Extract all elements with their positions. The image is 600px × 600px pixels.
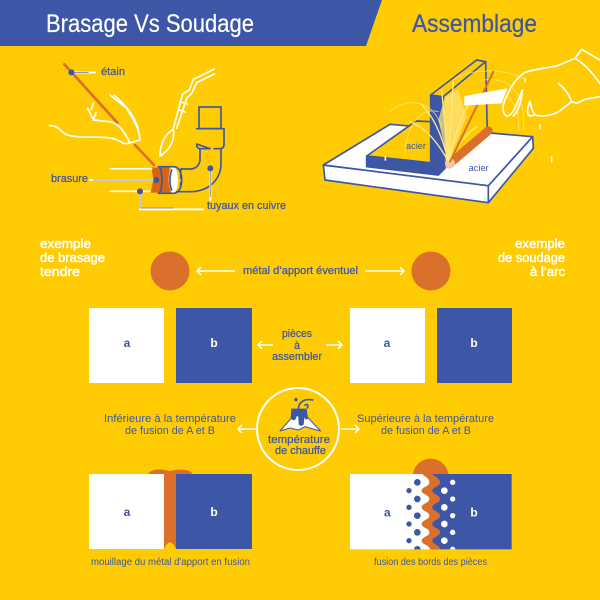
heading: exemple de soudage a l'arc: à l’arc — [530, 265, 565, 279]
heading: exemple de brasage tendre: exemple — [40, 237, 91, 251]
welded joint result — [350, 459, 512, 549]
steel upright plate — [367, 60, 487, 175]
label: acier left: acier — [406, 141, 426, 151]
icon: hand holding rod — [49, 95, 140, 144]
icon: gloved hand — [503, 49, 600, 116]
label: welding temperature: Supérieure à la température — [357, 413, 494, 425]
arrow right: filler metal — [365, 267, 404, 275]
white diffusion dots — [441, 480, 455, 549]
arrow left: pieces — [258, 341, 273, 349]
molten wavy band — [422, 474, 440, 549]
heading: exemple de soudage a l'arc: de soudage — [498, 251, 565, 265]
arrow right: pieces — [326, 341, 342, 349]
caption: welding: fusion des bords des pièces — [374, 557, 487, 568]
letter b: b — [210, 336, 218, 350]
label: pieces a assembler: à — [294, 340, 300, 352]
electrode holder — [464, 88, 507, 106]
piece a, welding — [350, 308, 425, 383]
filler metal circle left — [150, 252, 190, 290]
heading: exemple de soudage a l'arc: exemple — [515, 237, 565, 251]
icon: blowtorch with flame — [160, 69, 214, 156]
welding rod — [450, 72, 493, 162]
brazed joint result — [89, 469, 252, 549]
label: pieces a assembler: assembler — [272, 351, 322, 363]
piece b, welding — [437, 308, 512, 383]
label: brasure pointer — [90, 177, 159, 183]
label: welding temperature: de fusion de A et B — [381, 425, 471, 437]
arrow right: temperature — [341, 425, 359, 433]
steel base plate — [323, 124, 533, 203]
icon: copper elbow pipe — [177, 107, 224, 192]
illustration: arc welding of steel — [323, 49, 600, 203]
pipe guide lines — [110, 169, 152, 191]
letter b: b — [470, 506, 478, 520]
piece a — [350, 474, 432, 549]
letter b: b — [210, 505, 218, 519]
heating temperature circle — [257, 388, 339, 470]
title: Brasage Vs Soudage — [46, 10, 254, 38]
illustration: brazing a copper pipe — [49, 64, 224, 209]
piece b — [176, 474, 252, 549]
filler metal dome — [413, 459, 449, 495]
label: acier right: acier — [469, 163, 489, 173]
weld bead — [445, 131, 488, 168]
label: temperature de chauffe: de chauffe — [275, 445, 326, 457]
header band — [0, 0, 382, 46]
label: etain — [68, 69, 95, 75]
label: metal d'apport eventuel: métal d’apport éventuel — [243, 265, 358, 277]
label: etain: étain — [101, 66, 125, 78]
arrow left: temperature — [238, 425, 256, 433]
label: brasure: brasure — [51, 173, 88, 185]
section heading: assemblage: Assemblage — [412, 10, 537, 38]
piece b, brazing — [176, 308, 252, 383]
filler metal circle right — [412, 252, 450, 290]
heading: exemple de brasage tendre: tendre — [40, 265, 80, 279]
molten filler metal — [148, 469, 193, 549]
label: temperature de chauffe: température — [268, 434, 330, 446]
label: tuyaux en cuivre: tuyaux en cuivre — [207, 200, 286, 212]
brazing joint — [151, 167, 182, 193]
icon: solder rod — [64, 64, 154, 165]
piece b — [432, 474, 512, 549]
caption: brazing: mouillage du métal d'apport en fusion — [91, 557, 250, 568]
letter a: a — [384, 336, 391, 350]
label: pieces a assembler: pièces — [282, 328, 313, 340]
letter a: a — [124, 336, 131, 350]
icon: volcano — [280, 398, 321, 431]
label: brazing temperature: de fusion de A et B — [125, 425, 215, 437]
label: brazing temperature: Inférieure à la température — [104, 413, 236, 425]
letter a: a — [384, 506, 391, 520]
letter a: a — [124, 505, 131, 519]
letter b: b — [470, 336, 478, 350]
heading: exemple de brasage tendre: de brasage — [40, 251, 105, 265]
arrow left: filler metal — [197, 267, 235, 275]
piece a, brazing — [89, 308, 164, 383]
blue diffusion dots — [406, 479, 421, 549]
label: tuyaux pointers — [137, 165, 213, 209]
sparks — [385, 71, 552, 163]
piece a — [89, 474, 164, 549]
